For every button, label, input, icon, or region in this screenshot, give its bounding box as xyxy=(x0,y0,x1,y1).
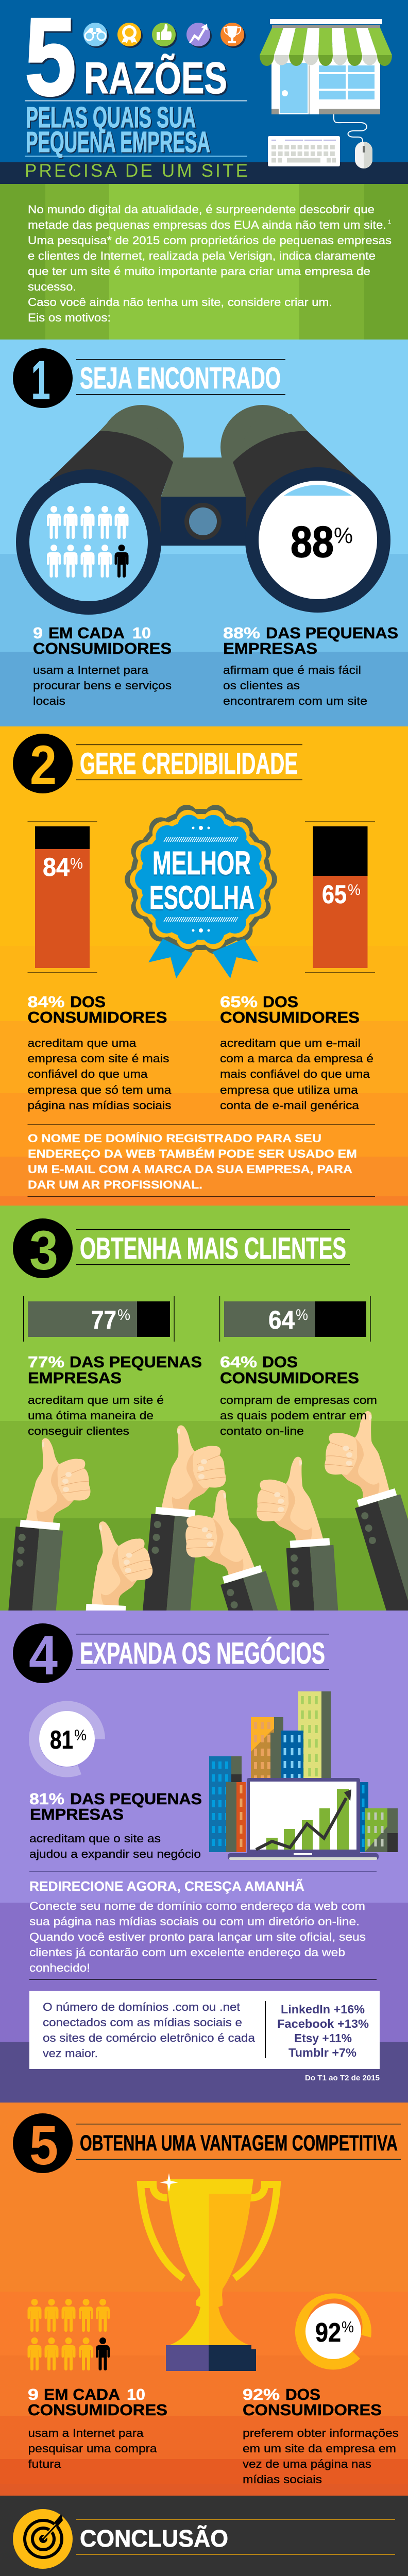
text block: 9 em cada 10 consumidores: pesquisar uma compra xyxy=(28,2442,157,2455)
text block: 9 em cada 10: 10 xyxy=(132,624,151,642)
panel: introduction xyxy=(0,184,408,340)
number badge 2: 2 xyxy=(30,734,57,796)
panel: conclusão xyxy=(0,2496,408,2576)
text block: 84% dos consumidores: confiável do que uma xyxy=(28,1067,148,1080)
number badge 1 xyxy=(13,348,73,411)
text block: 77% das pequenas empresas: uma ótima maneira de xyxy=(28,1409,154,1422)
panel: section 5 vantagem competitiva xyxy=(0,2103,408,2496)
text block: 9 em cada 10: locais xyxy=(33,694,65,707)
text block: 88% das pequenas empresas: 88% xyxy=(223,624,260,642)
text block: 92% dos consumidores: CONSUMIDORES xyxy=(243,2401,382,2419)
text block: 92% dos consumidores: em um site da empresa em xyxy=(243,2442,396,2455)
callout: nome de domínio: DAR UM AR PROFISSIONAL. xyxy=(28,1178,202,1191)
text block: 81% das pequenas empresas: EMPRESAS xyxy=(30,1805,124,1823)
badge: melhor escolha xyxy=(130,809,271,978)
bar chart: 84% xyxy=(28,821,97,973)
text block: 9 em cada 10: procurar bens e serviços xyxy=(33,679,172,692)
text block: 9 em cada 10 consumidores: usam a Internet para xyxy=(28,2427,144,2439)
text block: 77% das pequenas empresas: EMPRESAS xyxy=(28,1369,122,1387)
icon: people 9 of 10 xyxy=(28,2299,110,2370)
text block: 77% das pequenas empresas: conseguir clientes xyxy=(28,1425,129,1437)
text block: 88% das pequenas empresas: os clientes as xyxy=(223,679,300,692)
text block: 92% dos consumidores xyxy=(243,2385,399,2486)
panel: social domains box: LinkedIn +16% xyxy=(281,2003,365,2016)
text block: 84% dos consumidores: página nas mídias sociais xyxy=(28,1099,171,1112)
panel: section 2 gere credibilidade xyxy=(0,726,408,1206)
callout: nome de domínio: O NOME DE DOMÍNIO REGISTRADO PARA SEU xyxy=(28,1132,321,1145)
text block: 64% dos consumidores: contato on-line xyxy=(220,1425,304,1437)
text block: 64% dos consumidores: compram de empresas com xyxy=(220,1394,377,1406)
illustration: storefront xyxy=(260,19,392,114)
bar chart: 65% xyxy=(305,821,375,973)
panel: social domains box: O número de domínios .com ou .net xyxy=(43,2001,240,2013)
number badge 4: 4 xyxy=(29,1624,58,1686)
source note: Do T1 ao T2 de 2015 xyxy=(305,2074,380,2082)
intro text: Eis os motivos: xyxy=(28,311,111,324)
text block: 9 em cada 10: EM CADA xyxy=(48,624,125,642)
panel: social domains box: Facebook +13% xyxy=(277,2017,369,2030)
donut chart: 81%: 81 xyxy=(50,1725,73,1754)
bar chart: 77% xyxy=(23,1296,175,1342)
icon row xyxy=(83,23,246,48)
illustration: city and laptop chart xyxy=(209,1691,398,1860)
intro text: No mundo digital da atualidade, é surpreendente descobrir que xyxy=(28,203,375,216)
illustration: cable xyxy=(334,114,367,142)
text block: 92% dos consumidores: mídias sociais xyxy=(243,2473,322,2486)
text block: 65% dos consumidores: conta de e-mail genérica xyxy=(220,1099,360,1112)
intro text: 1 xyxy=(388,219,391,225)
text block: 9 em cada 10 consumidores: futura xyxy=(28,2458,61,2470)
text block: 9 em cada 10 consumidores: 10 xyxy=(127,2385,145,2403)
illustration: trophy xyxy=(141,2173,277,2371)
text block: 65% dos consumidores: DOS xyxy=(263,993,298,1011)
bar chart: 65%: 65 xyxy=(322,880,347,909)
intro text: Caso você ainda não tenha um site, considere criar um. xyxy=(28,296,332,309)
text block: 92% dos consumidores: preferem obter informações xyxy=(243,2427,399,2439)
panel: section 3 obtenha mais clientes xyxy=(0,1206,408,1778)
callout: redirecione agora: conhecido! xyxy=(29,1961,90,1974)
donut chart: 81% xyxy=(29,1701,105,1777)
text block: 81% das pequenas empresas: acreditam que o site as xyxy=(29,1832,161,1845)
donut chart: 92%: % xyxy=(342,2318,354,2336)
bar chart: 77%: % xyxy=(117,1307,130,1324)
number badge 4 xyxy=(13,1623,73,1686)
text block: 88% das pequenas empresas: encontrarem com um site xyxy=(223,694,367,707)
callout: nome de domínio xyxy=(28,1124,375,1197)
heading: SEJA ENCONTRADO xyxy=(80,362,281,395)
text block: 65% dos consumidores: empresa que utiliza uma xyxy=(220,1083,359,1096)
illustration: keyboard xyxy=(268,136,340,166)
text block: 64% dos consumidores: 64% xyxy=(220,1353,257,1371)
text block: 92% dos consumidores: DOS xyxy=(285,2385,320,2403)
number badge 5: 5 xyxy=(29,2114,58,2176)
bar chart: 64%: % xyxy=(296,1307,308,1324)
intro text: e clientes de Internet, realizada pela Verisign, indica claramente xyxy=(28,249,376,262)
callout: redirecione agora: Quando você estiver pronto para lançar um site oficial, seus xyxy=(29,1930,366,1943)
subtitle: PRECISA DE UM SITE xyxy=(25,161,248,181)
callout: nome de domínio: UM E-MAIL COM A MARCA DA SUA EMPRESA, PARA xyxy=(28,1163,352,1176)
badge: melhor escolha: ESCOLHA xyxy=(149,879,254,916)
text block: 64% dos consumidores: CONSUMIDORES xyxy=(220,1369,359,1387)
panel: social domains box: os sites de comércio eletrônico é cada xyxy=(43,2031,256,2044)
badge: melhor escolha: MELHOR xyxy=(152,844,251,882)
title: pelas quais sua pequena empresa: PEQUENA EMPRESA xyxy=(26,126,210,159)
number badge 3: 3 xyxy=(29,1219,58,1281)
stat: 88%: % xyxy=(334,523,353,548)
stat: 88%: 88 xyxy=(291,518,334,567)
intro text: que ter um site é muito importante para criar uma empresa de xyxy=(28,265,370,278)
text block: 81% das pequenas empresas: DAS PEQUENAS xyxy=(70,1790,202,1808)
text block: 9 em cada 10: usam a Internet para xyxy=(33,664,149,676)
panel: social domains box: Etsy +11% xyxy=(294,2031,352,2045)
text block: 64% dos consumidores: as quais podem entrar em xyxy=(220,1409,367,1422)
text block: 65% dos consumidores: acreditam que um e-mail xyxy=(220,1037,361,1049)
number badge 3 xyxy=(13,1218,73,1281)
intro text: sucesso. xyxy=(28,280,76,293)
text block: 65% dos consumidores: com a marca da empresa é xyxy=(220,1052,373,1065)
text block: 9 em cada 10: CONSUMIDORES xyxy=(33,639,172,657)
callout: redirecione agora: Conecte seu nome de domínio como endereço da web com xyxy=(29,1900,365,1912)
text block: 84% dos consumidores: empresa que só tem uma xyxy=(28,1083,172,1096)
illustration: binoculars xyxy=(16,405,390,615)
text block: 92% dos consumidores: 92% xyxy=(243,2385,280,2403)
text block: 9 em cada 10 consumidores: EM CADA xyxy=(44,2385,120,2403)
callout: redirecione agora: REDIRECIONE AGORA, CRESÇA AMANHÃ xyxy=(29,1878,304,1894)
intro text: Uma pesquisa* de 2015 com proprietários de pequenas empresas xyxy=(28,234,392,247)
title: pelas quais sua pequena empresa xyxy=(26,101,210,159)
callout: redirecione agora: sua página nas mídias sociais ou com um diretório on-line. xyxy=(29,1915,360,1928)
bar chart: 64%: 64 xyxy=(268,1306,295,1334)
text block: 88% das pequenas empresas: afirmam que é mais fácil xyxy=(223,664,361,676)
bar chart: 84%: % xyxy=(70,855,83,872)
donut chart: 92% xyxy=(295,2293,371,2369)
donut chart: 92%: 92 xyxy=(315,2318,341,2348)
panel: section 1 seja encontrado xyxy=(0,340,408,726)
bar chart: 84%: 84 xyxy=(43,853,70,882)
text block: 81% das pequenas empresas: ajudou a expandir seu negócio xyxy=(29,1848,201,1860)
number badge 5 xyxy=(13,2113,73,2176)
panel: social domains box: vez maior. xyxy=(43,2047,98,2060)
title: razões: RAZÕES xyxy=(84,54,227,103)
text block: 81% das pequenas empresas xyxy=(29,1790,202,1860)
text block: 65% dos consumidores: mais confiável do que uma xyxy=(220,1067,370,1080)
text block: 77% das pequenas empresas xyxy=(28,1353,202,1437)
text block: 77% das pequenas empresas: DAS PEQUENAS xyxy=(70,1353,202,1371)
text block: 84% dos consumidores xyxy=(28,993,172,1112)
panel: social domains box: Tumblr +7% xyxy=(288,2046,356,2059)
heading: CONCLUSÃO xyxy=(80,2525,228,2552)
panel: social domains box: conectados com as mídias sociais e xyxy=(43,2016,242,2029)
title: pelas quais sua pequena empresa: PELAS QUAIS SUA xyxy=(26,101,196,134)
intro text xyxy=(28,203,392,324)
text block: 9 em cada 10 consumidores: CONSUMIDORES xyxy=(28,2401,167,2419)
text block: 77% das pequenas empresas: 77% xyxy=(28,1353,64,1371)
text block: 88% das pequenas empresas: DAS PEQUENAS xyxy=(266,624,398,642)
text block: 9 em cada 10 consumidores: 9 xyxy=(28,2385,39,2403)
text block: 84% dos consumidores: acreditam que uma xyxy=(28,1037,137,1049)
number badge 1: 1 xyxy=(31,349,50,411)
text block: 84% dos consumidores: CONSUMIDORES xyxy=(28,1008,167,1026)
text block: 65% dos consumidores: 65% xyxy=(220,993,258,1011)
intro text: metade das pequenas empresas dos EUA ainda não tem um site. xyxy=(28,218,386,231)
text block: 64% dos consumidores: DOS xyxy=(262,1353,298,1371)
illustration: thumbs up hands xyxy=(2,1411,408,1778)
text block: 81% das pequenas empresas: 81% xyxy=(29,1790,64,1808)
bar chart: 64% xyxy=(219,1296,371,1342)
text block: 84% dos consumidores: 84% xyxy=(28,993,65,1011)
bar chart: 77%: 77 xyxy=(91,1306,116,1334)
text block: 77% das pequenas empresas: acreditam que um site é xyxy=(28,1394,164,1406)
text block: 84% dos consumidores: empresa com site é mais xyxy=(28,1052,169,1065)
panel: social domains box xyxy=(29,1991,380,2069)
text block: 84% dos consumidores: DOS xyxy=(70,993,106,1011)
icon: target xyxy=(13,2509,73,2569)
panel: section 4 expanda os negócios xyxy=(0,1611,408,2103)
illustration: mouse xyxy=(355,142,372,168)
text block: 92% dos consumidores: vez de uma página nas xyxy=(243,2458,371,2470)
text block: 9 em cada 10 consumidores xyxy=(28,2385,167,2470)
bar chart: 65%: % xyxy=(348,882,361,899)
text block: 88% das pequenas empresas xyxy=(223,624,398,707)
callout: redirecione agora: clientes já contarão com um excelente endereço da web xyxy=(29,1946,345,1959)
text block: 65% dos consumidores: CONSUMIDORES xyxy=(220,1008,360,1026)
text block: 88% das pequenas empresas: EMPRESAS xyxy=(223,639,317,657)
icon: people 9 of 10 xyxy=(47,506,129,578)
callout: nome de domínio: ENDEREÇO DA WEB TAMBÉM PODE SER USADO EM xyxy=(28,1147,357,1160)
text block: 64% dos consumidores xyxy=(220,1353,377,1437)
text block: 9 em cada 10 xyxy=(33,624,172,707)
donut chart: 81%: % xyxy=(74,1727,87,1744)
heading: GERE CREDIBILIDADE xyxy=(80,747,298,781)
text block: 65% dos consumidores xyxy=(220,993,373,1112)
panel: header xyxy=(0,0,408,184)
text block: 9 em cada 10: 9 xyxy=(33,624,43,642)
callout: redirecione agora xyxy=(29,1871,377,1980)
number badge 2 xyxy=(13,734,73,796)
